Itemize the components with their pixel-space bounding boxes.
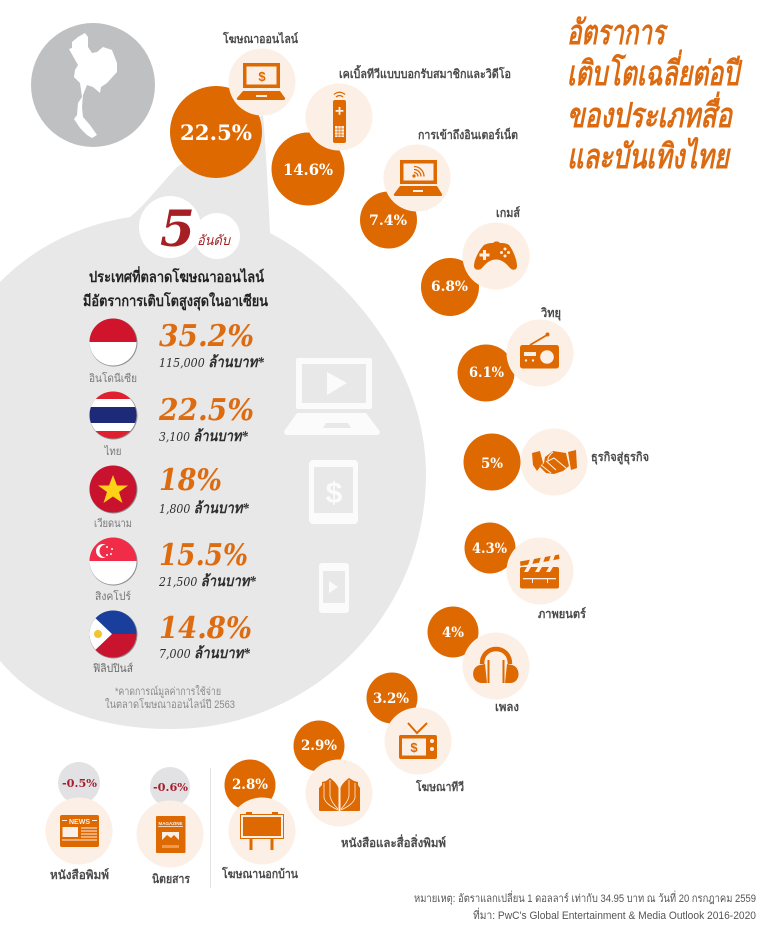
- item: TV advertising 3.2%: [366, 672, 464, 794]
- country row: Vietnam: 1,800 ล้านบาท*: [159, 500, 249, 517]
- icon: radio: [520, 332, 559, 368]
- item: radio 6.1%: [458, 306, 574, 402]
- item: radio 6.1%: 6.1%: [469, 365, 504, 381]
- country row: Singapore: [89, 537, 256, 603]
- item: TV advertising 3.2%: 3.2%: [373, 691, 409, 707]
- heading: [83, 266, 269, 311]
- country row: Indonesia: 115,000 ล้านบาท*: [159, 354, 264, 371]
- country row: Philippines: [89, 610, 252, 675]
- item: TV advertising 3.2%: โฆษณาทีวี: [415, 779, 464, 794]
- source note: [414, 890, 756, 922]
- item: newspapers -0.5%: [46, 762, 112, 882]
- footnote: [105, 685, 235, 711]
- country row: Singapore: 21,500 ล้านบาท*: [158, 573, 256, 590]
- icon: laptop dollar: [237, 63, 285, 100]
- map of Thailand: [31, 23, 155, 147]
- item: books and print 2.9%: หนังสือและสื่อสิ่งพิมพ์: [341, 834, 446, 850]
- country row: Thailand: [89, 391, 254, 458]
- device icons: [284, 358, 380, 613]
- gray callout background: [0, 115, 426, 729]
- item: out-of-home advertising 2.8%: 2.8%: [232, 777, 268, 793]
- country row: Thailand: 3,100 ล้านบาท*: [159, 428, 248, 445]
- item: film 4.3%: [464, 522, 587, 621]
- item: music 4%: 4%: [442, 625, 464, 641]
- item: games 6.8%: [421, 206, 530, 316]
- item: B2B 5%: 5%: [481, 456, 503, 472]
- heading: ประเทศที่ตลาดโฆษณาออนไลน์: [89, 266, 265, 286]
- icon: handshake: [532, 450, 577, 474]
- rank badge: 5: [139, 196, 240, 259]
- device icons: $: [326, 477, 343, 510]
- item: out-of-home advertising 2.8%: โฆษณานอกบ้าน: [221, 866, 299, 881]
- icon: open book: [319, 778, 360, 811]
- divider: [210, 768, 211, 888]
- country row: Indonesia: [89, 318, 264, 385]
- item: online advertising 22.5%: โฆษณาออนไลน์: [222, 31, 299, 46]
- item: books and print 2.9%: [294, 720, 446, 850]
- country row: Vietnam: [89, 463, 249, 530]
- item: cable TV and video 14.6%: 14.6%: [283, 160, 333, 179]
- country row: Indonesia: 35.2%: [159, 319, 254, 354]
- item: music 4%: [428, 606, 530, 714]
- country row: Philippines: 14.8%: [159, 611, 252, 646]
- item: internet access 7.4%: 7.4%: [369, 213, 407, 229]
- icon: newspaper: NEWS: [69, 819, 90, 826]
- icon: clapperboard: [520, 554, 560, 588]
- icon: TV: $: [410, 740, 418, 755]
- title: อัตราการ: [567, 15, 668, 52]
- item: internet access 7.4%: [360, 127, 518, 248]
- country row: Indonesia: อินโดนีเซีย: [89, 371, 137, 385]
- icon: headphones: [473, 649, 519, 683]
- item: radio 6.1%: วิทยุ: [541, 306, 561, 321]
- icon: remote control: [333, 92, 346, 143]
- country row: Philippines: 7,000 ล้านบาท*: [159, 645, 250, 662]
- icon: laptop dollar: $: [258, 69, 266, 84]
- footnote: ในตลาดโฆษณาออนไลน์ปี 2563: [105, 697, 235, 711]
- country row: Vietnam: 18%: [159, 463, 222, 498]
- item: online advertising 22.5%: 22.5%: [180, 120, 252, 145]
- item: online advertising 22.5%: [170, 31, 299, 178]
- country row: Singapore: 15.5%: [159, 538, 248, 573]
- item: games 6.8%: เกมส์: [496, 206, 521, 220]
- item: film 4.3%: 4.3%: [472, 541, 507, 557]
- item: film 4.3%: ภาพยนตร์: [538, 607, 587, 621]
- title: [567, 15, 743, 176]
- country row: Vietnam: เวียดนาม: [94, 517, 132, 530]
- icon: game controller: [474, 242, 517, 270]
- item: internet access 7.4%: การเข้าถึงอินเตอร์เน็ต: [418, 127, 518, 142]
- item: newspapers -0.5%: หนังสือพิมพ์: [50, 868, 109, 882]
- country row: Singapore: สิงคโปร์: [95, 589, 131, 603]
- footnote: *คาดการณ์มูลค่าการใช้จ่าย: [115, 685, 221, 698]
- source note: ที่มา: PwC's Global Entertainment & Media Outlook 2016-2020: [473, 907, 756, 922]
- item: B2B 5%: [464, 428, 649, 496]
- item: newspapers -0.5%: -0.5%: [62, 777, 98, 790]
- item: cable TV and video 14.6%: [272, 64, 511, 206]
- item: B2B 5%: ธุรกิจสู่ธุรกิจ: [591, 450, 649, 465]
- item: magazines -0.6%: [136, 767, 204, 886]
- item: games 6.8%: 6.8%: [431, 279, 468, 295]
- item: books and print 2.9%: 2.9%: [301, 738, 337, 754]
- item: magazines -0.6%: นิตยสาร: [152, 872, 190, 886]
- icon: laptop wifi: [394, 160, 442, 196]
- icon: magazine: MAGAZINE: [158, 821, 182, 826]
- heading: มีอัตราการเติบโตสูงสุดในอาเซียน: [83, 291, 269, 311]
- item: cable TV and video 14.6%: เคเบิ้ลทีวีแบบบอกรับสมาชิกและวิดีโอ: [339, 64, 511, 81]
- item: out-of-home advertising 2.8%: [221, 760, 299, 881]
- rank badge: 5: 5: [160, 199, 195, 258]
- country row: Thailand: ไทย: [104, 445, 122, 458]
- panel: top 5 ASEAN online advertising markets: [0, 115, 426, 729]
- item: music 4%: เพลง: [495, 700, 519, 714]
- country row: Thailand: 22.5%: [158, 393, 254, 428]
- icon: billboard: [240, 812, 284, 850]
- rank badge: 5: อันดับ: [197, 233, 231, 249]
- item: magazines -0.6%: -0.6%: [153, 781, 189, 794]
- country row: Philippines: ฟิลิปปินส์: [93, 662, 133, 675]
